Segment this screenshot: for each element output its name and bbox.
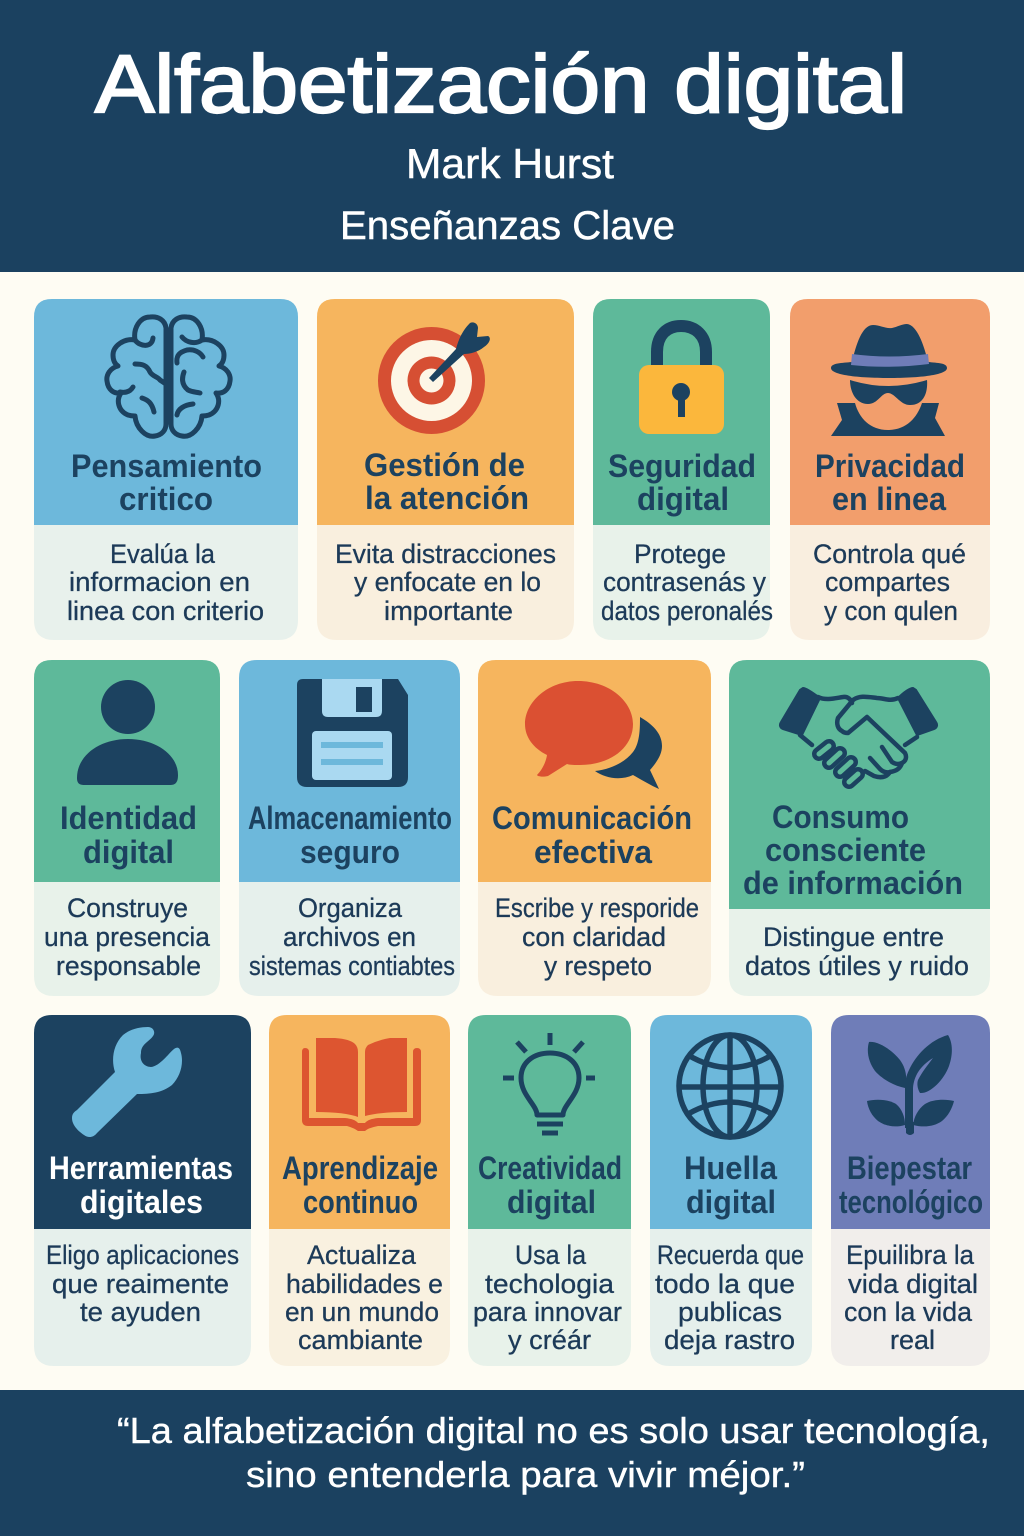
- heading: [282, 1150, 438, 1220]
- heading: [492, 800, 692, 870]
- text block: Distingue entre: [763, 922, 944, 952]
- heading: [684, 1150, 777, 1220]
- heading: Pensamiento: [71, 448, 262, 484]
- header banner: [0, 0, 1024, 272]
- heading: digitales: [80, 1184, 203, 1220]
- heading: digital: [637, 481, 729, 517]
- text block: con la vida: [844, 1297, 973, 1327]
- text block: en un mundo: [285, 1297, 439, 1327]
- author: Mark Hurst: [406, 140, 614, 187]
- text block: compartes: [825, 567, 950, 597]
- text block: Escribe y resporide: [495, 893, 699, 923]
- heading: Comunicación: [492, 800, 692, 836]
- heading: Herramientas: [49, 1150, 233, 1186]
- heading: digital: [83, 834, 174, 870]
- text block: techologia: [485, 1269, 615, 1299]
- icon: handshake: [780, 688, 937, 782]
- heading: [743, 799, 963, 901]
- text block: [473, 1240, 622, 1355]
- text block: Usa la: [515, 1240, 587, 1270]
- text block: Evita distracciones: [335, 539, 556, 569]
- text block: datos útiles y ruido: [745, 951, 969, 981]
- heading: Consumo: [772, 799, 909, 835]
- heading: [608, 448, 756, 517]
- text block: [813, 539, 966, 626]
- icon: wrench: [72, 1027, 182, 1137]
- heading: efectiva: [534, 834, 652, 870]
- heading: [364, 447, 529, 516]
- panel: Creatividad digital: [468, 1015, 631, 1366]
- quote: sino entenderla para vivir méjor.”: [246, 1454, 805, 1495]
- heading: en linea: [832, 481, 946, 517]
- heading: Almacenamiento: [248, 800, 452, 836]
- text block: real: [890, 1325, 935, 1355]
- heading: [71, 448, 262, 517]
- text block: [601, 539, 773, 626]
- text block: Construye: [67, 893, 188, 923]
- heading: [60, 800, 197, 870]
- text block: Organiza: [298, 893, 403, 923]
- text block: [495, 893, 699, 981]
- heading: seguro: [300, 834, 400, 870]
- heading: critico: [119, 481, 213, 517]
- heading: Seguridad: [608, 448, 756, 484]
- icon: plant: [867, 1035, 954, 1135]
- icon: open book: [302, 1038, 421, 1131]
- text block: [335, 539, 556, 626]
- text block: que reaimente: [52, 1269, 229, 1299]
- panel: Consumo consciente de información: [729, 660, 990, 996]
- heading: Biepestar: [847, 1150, 972, 1186]
- text block: y créár: [508, 1325, 591, 1355]
- heading: de información: [743, 865, 963, 901]
- panel: Pensamiento critico: [34, 299, 298, 640]
- text block: [44, 893, 211, 981]
- subtitle: Enseñanzas Clave: [340, 204, 675, 248]
- panel: Comunicación efectiva: [478, 660, 711, 996]
- text block: Controla qué: [813, 539, 966, 569]
- icon: brain: [107, 317, 230, 436]
- text block: y enfocate en lo: [354, 567, 541, 597]
- icon: spy: [831, 324, 947, 436]
- heading: Identidad: [60, 800, 197, 836]
- text block: todo la que: [655, 1269, 795, 1299]
- panel: Seguridad digital: [593, 299, 773, 640]
- text block: Protege: [634, 539, 726, 569]
- text block: [655, 1240, 804, 1355]
- text block: vida digital: [848, 1269, 978, 1299]
- icon: light bulb: [503, 1033, 595, 1133]
- heading: la atención: [365, 480, 529, 516]
- heading: Creatividad: [478, 1150, 622, 1186]
- heading: [839, 1150, 983, 1220]
- heading: Gestión de: [364, 447, 525, 483]
- title: Alfabetización digital: [95, 39, 907, 130]
- text block: datos peronalés: [601, 596, 773, 626]
- panel: Almacenamiento seguro: [239, 660, 460, 996]
- text block: con claridad: [522, 922, 666, 952]
- quote: [117, 1410, 990, 1495]
- icon: floppy disk: [297, 679, 408, 787]
- text block: [67, 539, 264, 626]
- text block: te ayuden: [80, 1297, 201, 1327]
- text block: [745, 922, 969, 981]
- panel: Privacidad en linea: [790, 299, 990, 640]
- text block: deja rastro: [664, 1325, 795, 1355]
- heading: tecnológico: [839, 1184, 983, 1220]
- text block: Evalúa la: [110, 539, 216, 569]
- text block: una presencia: [44, 922, 211, 952]
- text block: importante: [384, 596, 513, 626]
- panel: Identidad digital: [34, 660, 220, 996]
- heading: digital: [686, 1184, 776, 1220]
- icon: target: [378, 322, 490, 434]
- text block: [46, 1240, 239, 1327]
- text block: sistemas contiabtes: [249, 951, 455, 981]
- panel: Gestión de la atención: [317, 299, 574, 640]
- text block: informacion en: [69, 567, 250, 597]
- panel: Aprendizaje continuo: [269, 1015, 450, 1366]
- heading: Privacidad: [815, 448, 965, 484]
- heading: [815, 448, 965, 517]
- text block: contrasenás y: [603, 567, 766, 597]
- text block: Epuilibra la: [846, 1240, 975, 1270]
- icon: padlock: [639, 326, 724, 434]
- icon: globe: [679, 1035, 781, 1137]
- heading: continuo: [303, 1184, 418, 1220]
- text block: para innovar: [473, 1297, 622, 1327]
- heading: digital: [507, 1184, 596, 1220]
- text block: habilidades e: [286, 1269, 443, 1299]
- text block: archivos en: [283, 922, 416, 952]
- heading: Huella: [684, 1150, 777, 1186]
- text block: [844, 1240, 978, 1355]
- text block: y con qulen: [824, 596, 958, 626]
- heading: consciente: [765, 832, 926, 868]
- text block: linea con criterio: [67, 596, 264, 626]
- heading: [49, 1150, 233, 1220]
- panel: Bienestar tecnológico: [831, 1015, 990, 1366]
- panel: Herramientas digitales: [34, 1015, 251, 1366]
- heading: [478, 1150, 622, 1220]
- text block: [249, 893, 455, 981]
- text block: responsable: [56, 951, 201, 981]
- panel: Huella digital: [650, 1015, 812, 1366]
- heading: [248, 800, 452, 870]
- footer quote banner: [0, 1390, 1024, 1536]
- text block: y respeto: [544, 951, 652, 981]
- icon: speech bubbles: [525, 681, 662, 789]
- text block: publicas: [678, 1297, 782, 1327]
- text block: Actualiza: [307, 1240, 417, 1270]
- text block: [285, 1240, 443, 1355]
- heading: Aprendizaje: [282, 1150, 438, 1186]
- text block: Recuerda que: [657, 1240, 804, 1270]
- text block: Eligo aplicaciones: [46, 1240, 239, 1270]
- text block: cambiante: [298, 1325, 423, 1355]
- quote: “La alfabetización digital no es solo usar tecnología,: [117, 1410, 990, 1451]
- icon: person: [77, 680, 178, 785]
